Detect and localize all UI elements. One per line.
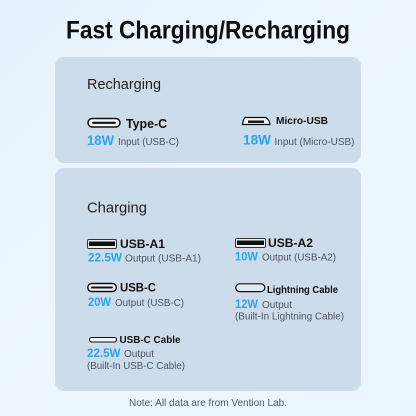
label: usb-c cable: USB-C Cable — [120, 335, 181, 346]
icon: usb-a2 port — [236, 238, 266, 248]
power: 18W input usb-c: Input (USB-C) — [118, 137, 179, 148]
label: micro-usb: Micro-USB — [276, 115, 328, 127]
label: usb-a2: USB-A2 — [268, 238, 313, 250]
heading: recharging: Recharging — [87, 76, 161, 93]
label: usb-a1: USB-A1 — [120, 239, 166, 251]
power: 10W output usb-a2: 10W — [235, 250, 259, 264]
power: 22.5W output usb-a1: Output (USB-A1) — [125, 254, 201, 264]
heading: charging: Charging — [87, 200, 147, 216]
power: 12W output lightning — [235, 297, 344, 322]
power: 10W output usb-a2 — [235, 250, 336, 264]
power: 18W input usb-c — [87, 133, 179, 148]
power: 22.5W output usb-a1: 22.5W — [88, 250, 123, 264]
power: 22.5W output usb-a1 — [88, 250, 201, 264]
icon: usb-a1 port — [88, 240, 116, 248]
panel: recharging — [55, 57, 361, 163]
power: 12W output lightning: Output — [262, 300, 292, 311]
label: type-c: Type-C — [126, 117, 167, 131]
icon: usb-c cable — [90, 338, 116, 342]
label: usb-c: USB-C — [120, 282, 156, 294]
icon: micro-usb port — [242, 118, 270, 124]
power: 20W output usb-c: Output (USB-C) — [115, 298, 184, 309]
power: 22.5W output usb-c cable: (Built-In USB-C Cable) — [87, 361, 185, 372]
power: 20W output usb-c — [88, 295, 184, 309]
power: 10W output usb-a2: Output (USB-A2) — [262, 252, 336, 264]
power: 20W output usb-c: 20W — [88, 295, 112, 309]
label: lightning cable: Lightning Cable — [267, 285, 338, 296]
power: 18W input micro-usb: 18W — [243, 132, 271, 148]
power: 18W input usb-c: 18W — [87, 133, 114, 148]
power: 12W output lightning: 12W — [235, 297, 259, 311]
power: 22.5W output usb-c cable — [87, 346, 185, 372]
power: 12W output lightning: (Built-In Lightning Cable) — [235, 312, 344, 322]
icon: usb-c port — [88, 284, 116, 292]
power: 22.5W output usb-c cable: Output — [124, 349, 154, 360]
power: 18W input micro-usb — [243, 132, 354, 148]
icon: type-c port — [88, 118, 120, 127]
icon: lightning port — [236, 284, 265, 292]
panel: charging — [55, 168, 361, 391]
title: Fast Charging/Recharging — [66, 16, 350, 44]
power: 18W input micro-usb: Input (Micro-USB) — [274, 137, 354, 148]
power: 22.5W output usb-c cable: 22.5W — [87, 346, 121, 360]
footnote: Note: All data are from Vention Lab. — [129, 398, 287, 409]
